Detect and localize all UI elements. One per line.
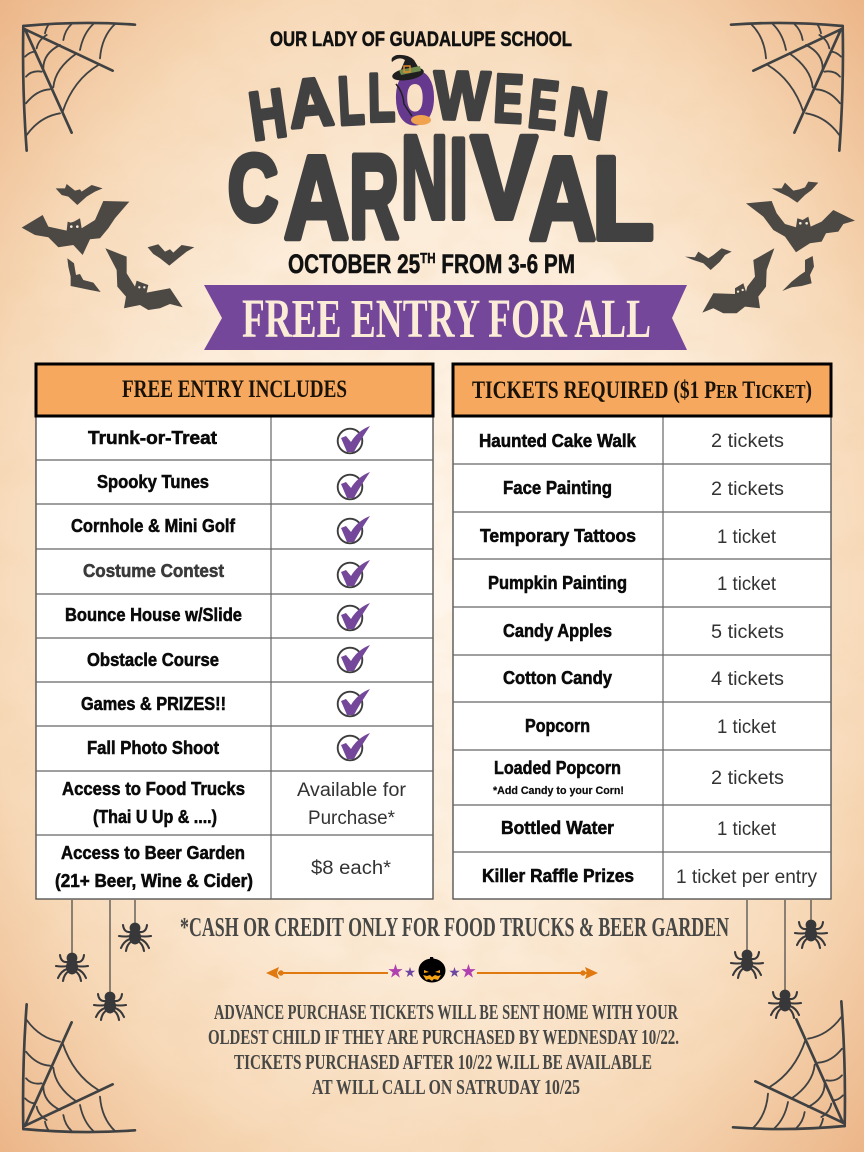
free entry activities: (Thai U Up & ....): [93, 807, 217, 827]
title: Carnival: A: [284, 132, 349, 264]
cobweb top right: [731, 23, 843, 151]
ticket prices: 4 tickets: [711, 669, 784, 690]
ribbon banner: [204, 285, 687, 350]
free entry activities: Games & PRIZES!!: [81, 694, 226, 714]
free entry activities: Access to Beer Garden: [61, 843, 245, 863]
advance purchase notice: OLDEST CHILD IF THEY ARE PURCHASED BY WEDNESDAY 10/22.: [208, 1025, 679, 1049]
event date: TH: [420, 250, 436, 267]
ticket activities: Pumpkin Painting: [488, 573, 627, 593]
bats right group: [685, 182, 855, 313]
free entry activities: Bounce House w/Slide: [65, 605, 242, 625]
spiders left: [56, 900, 151, 1020]
spiders right: [731, 900, 827, 1018]
ticket activities: Bottled Water: [501, 818, 614, 838]
title: Halloween: N: [560, 73, 612, 155]
heading: tickets required: [453, 364, 831, 416]
title: Carnival: [228, 112, 654, 265]
free entry activities: Spooky Tunes: [97, 472, 209, 492]
title: Halloween: L: [367, 60, 396, 136]
table body: [36, 416, 433, 899]
ticket activities: Face Painting: [503, 478, 612, 498]
ticket prices: 1 ticket: [717, 819, 777, 840]
ticket activities: *Add Candy to your Corn!: [493, 785, 624, 797]
advance purchase notice: AT WILL CALL ON SATRUDAY 10/25: [312, 1075, 580, 1099]
ticket prices: 1 ticket per entry: [676, 867, 817, 888]
school name: OUR LADY OF GUADALUPE SCHOOL: [270, 28, 572, 51]
title: Halloween: E: [525, 66, 562, 144]
cobweb top left: [23, 23, 135, 151]
ticket activities: Candy Apples: [503, 621, 612, 641]
purchase notes: [297, 780, 407, 879]
event date: FROM 3-6 PM: [436, 249, 575, 279]
ticket activities: Popcorn: [525, 716, 590, 736]
heading: free entry includes: [36, 364, 433, 416]
icons: check marks: [338, 426, 370, 760]
ticket prices: 2 tickets: [711, 431, 784, 452]
ticket prices: 1 ticket: [717, 527, 777, 548]
cobweb bottom left: [23, 1004, 135, 1132]
free entry activities: [55, 428, 253, 891]
free entry activities: Obstacle Course: [87, 650, 219, 670]
title: Carnival: L: [592, 133, 654, 265]
ticket prices: 5 tickets: [711, 622, 784, 643]
title: Carnival: A: [529, 133, 596, 265]
heading: tickets required: TICKETS REQUIRED ($1 PER TICKET): [472, 377, 812, 404]
ticket prices: 2 tickets: [711, 768, 784, 789]
event date: OCTOBER 25: [288, 249, 460, 279]
free entry activities: Fall Photo Shoot: [87, 738, 219, 758]
free entry activities: Cornhole & Mini Golf: [71, 516, 236, 536]
title: Halloween: L: [336, 62, 366, 140]
divider: arrows, stars and pumpkin: [266, 957, 598, 982]
title: Halloween: A: [286, 63, 336, 143]
ticket prices: 1 ticket: [717, 574, 777, 595]
title: Carnival: I: [449, 116, 468, 243]
banner text: FREE ENTRY FOR ALL: [242, 288, 651, 349]
ticket activities: Cotton Candy: [503, 668, 612, 688]
bats left group: [22, 184, 194, 310]
heading: free entry includes: FREE ENTRY INCLUDES: [122, 376, 347, 403]
panel: free entry includes: [36, 364, 433, 899]
ticket prices: 2 tickets: [711, 479, 784, 500]
ticket activities: Haunted Cake Walk: [479, 431, 637, 451]
table body: [453, 416, 831, 899]
title: Carnival: V: [471, 112, 537, 244]
icon: witch hat letter O: O: [396, 59, 434, 137]
ticket prices: 1 ticket: [717, 717, 777, 738]
free entry activities: Trunk-or-Treat: [88, 428, 217, 448]
title: Carnival: C: [228, 135, 278, 240]
purchase notes: Purchase*: [308, 808, 396, 829]
ticket activities: Loaded Popcorn: [494, 758, 621, 778]
title: Halloween: E: [492, 60, 525, 138]
cobweb bottom right: [733, 1001, 845, 1129]
icon: jack-o-lantern: [418, 957, 446, 982]
ticket activities: [479, 431, 637, 886]
ticket prices: [676, 431, 817, 888]
purchase notes: Available for: [297, 780, 407, 801]
title: Carnival: R: [349, 130, 399, 264]
icon: witch hat letter O: [391, 55, 434, 137]
advance purchase notice: [208, 1000, 679, 1099]
advance purchase notice: TICKETS PURCHASED AFTER 10/22 W.ILL BE AVAILABLE: [234, 1050, 652, 1074]
purchase notes: $8 each*: [311, 858, 392, 879]
title: Halloween: [245, 58, 612, 155]
ticket activities: Temporary Tattoos: [480, 526, 636, 546]
ticket activities: Killer Raffle Prizes: [482, 866, 634, 886]
title: Halloween: H: [245, 75, 291, 155]
free entry activities: (21+ Beer, Wine & Cider): [55, 871, 253, 891]
free entry activities: Costume Contest: [83, 561, 224, 581]
title: Halloween: W: [433, 58, 491, 134]
free entry activities: Access to Food Trucks: [62, 779, 245, 799]
panel: tickets required: [453, 364, 831, 899]
title: Carnival: N: [401, 112, 448, 244]
